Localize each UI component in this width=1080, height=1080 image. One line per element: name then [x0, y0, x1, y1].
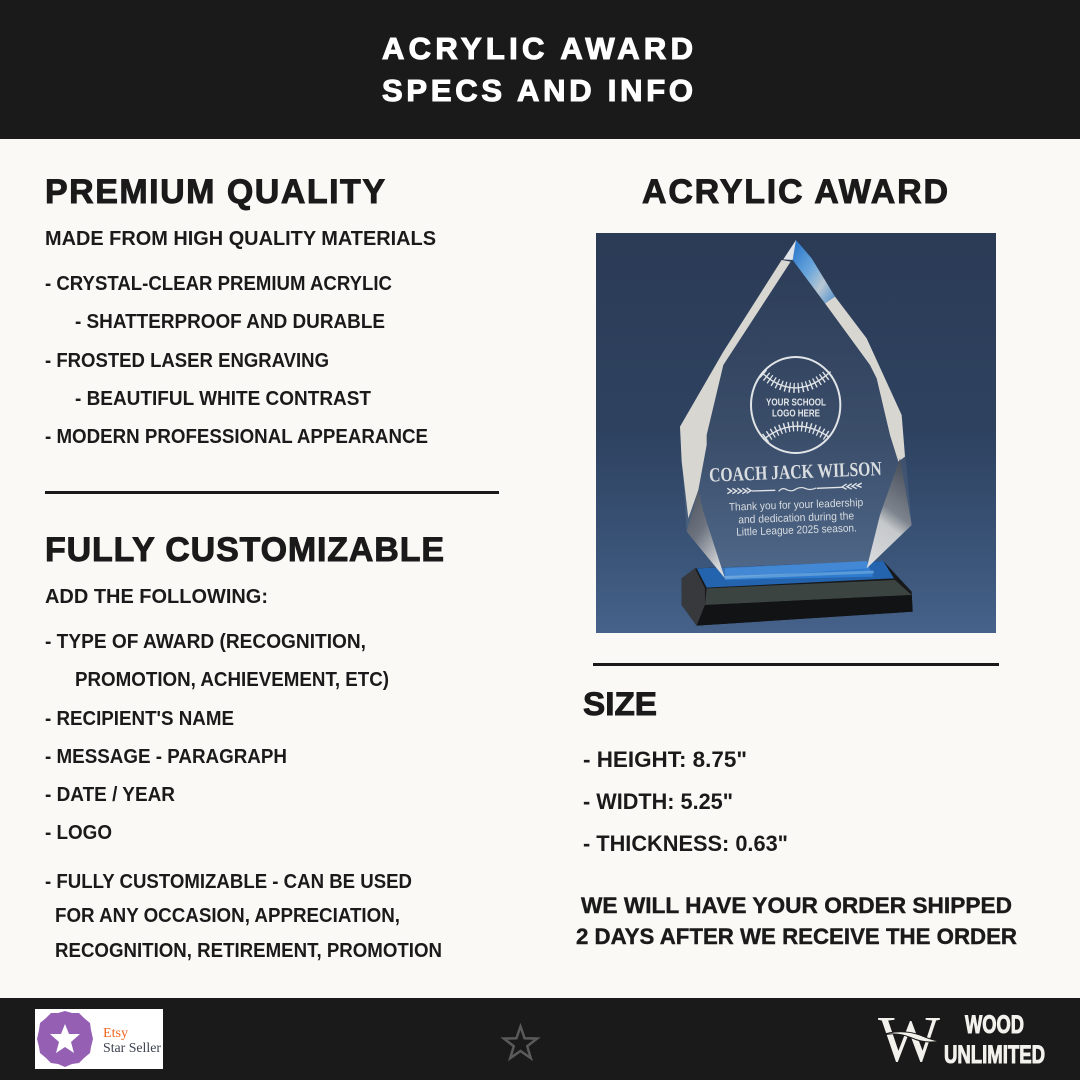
- logo: wood unlimited: UNLIMITED: [944, 1041, 1045, 1069]
- heading: acrylic award: ACRYLIC AWARD: [642, 173, 948, 211]
- list: material features: [45, 228, 436, 448]
- list: customization options: - TYPE OF AWARD (RECOGNITION,: [45, 631, 366, 653]
- logo: wood unlimited: [878, 1003, 1045, 1076]
- logo placeholder text: YOUR SCHOOL: [766, 397, 826, 408]
- list: customization options: [45, 586, 442, 962]
- heading: size: SIZE: [583, 686, 657, 722]
- list: customization options: ADD THE FOLLOWING:: [45, 586, 268, 608]
- panel: size specs: [583, 686, 788, 856]
- list: material features: - MODERN PROFESSIONAL APPEARANCE: [45, 426, 428, 448]
- list: dimensions: - THICKNESS: 0.63": [583, 831, 788, 856]
- icon: etsy star seller badge: [35, 1009, 163, 1069]
- list: dimensions: - WIDTH: 5.25": [583, 789, 733, 814]
- logo placeholder text: LOGO HERE: [772, 409, 820, 420]
- engraved message: [729, 497, 863, 539]
- engraved flourish: [727, 483, 862, 494]
- list: customization options: - LOGO: [45, 822, 112, 844]
- list: material features: - BEAUTIFUL WHITE CONTRAST: [75, 388, 371, 410]
- engraved message: Thank you for your leadership: [729, 497, 863, 514]
- logo: wood unlimited: W: [878, 1003, 941, 1076]
- list: dimensions: [583, 747, 788, 856]
- footer band: [0, 998, 1080, 1080]
- header band with title: ACRYLIC AWARD: [382, 31, 693, 66]
- heading: fully customizable: FULLY CUSTOMIZABLE: [45, 531, 444, 569]
- list: material features: - FROSTED LASER ENGRAVING: [45, 350, 329, 372]
- shipping note: WE WILL HAVE YOUR ORDER SHIPPED: [581, 893, 1012, 918]
- list: customization options: - FULLY CUSTOMIZABLE - CAN BE USED: [45, 871, 412, 893]
- icon: etsy star seller badge: Etsy: [103, 1026, 128, 1041]
- list: customization options: FOR ANY OCCASION, APPRECIATION,: [55, 905, 400, 927]
- icon: acrylic trophy: [680, 240, 912, 578]
- engraved message: and dedication during the: [738, 510, 854, 526]
- list: material features: - CRYSTAL-CLEAR PREMIUM ACRYLIC: [45, 273, 392, 295]
- list: customization options: - RECIPIENT'S NAME: [45, 708, 234, 730]
- panel: premium quality: [45, 173, 436, 448]
- list: customization options: - DATE / YEAR: [45, 784, 176, 806]
- header band with title: SPECS AND INFO: [382, 73, 693, 108]
- logo placeholder text: [766, 397, 826, 420]
- logo: wood unlimited: WOOD: [965, 1011, 1024, 1039]
- icon: award base: [682, 561, 913, 626]
- engraved name: COACH JACK WILSON: [709, 458, 882, 487]
- icon: etsy star seller badge: Star Seller: [103, 1041, 161, 1056]
- list: customization options: - MESSAGE - PARAGRAPH: [45, 746, 287, 768]
- list: material features: MADE FROM HIGH QUALITY MATERIALS: [45, 228, 436, 250]
- shipping note: [576, 893, 1017, 949]
- engraved message: Little League 2025 season.: [736, 522, 857, 539]
- header band with title: [0, 0, 1080, 139]
- heading: premium quality: PREMIUM QUALITY: [45, 173, 385, 211]
- list: customization options: RECOGNITION, RETIREMENT, PROMOTION: [55, 940, 442, 962]
- list: customization options: PROMOTION, ACHIEVEMENT, ETC): [75, 669, 389, 691]
- panel: fully customizable: [45, 531, 444, 962]
- icon: baseball logo: [751, 357, 840, 453]
- product image: acrylic award: [596, 233, 996, 633]
- shipping note: 2 DAYS AFTER WE RECEIVE THE ORDER: [576, 924, 1017, 949]
- list: dimensions: - HEIGHT: 8.75": [583, 747, 747, 772]
- icon: star outline: [504, 1026, 537, 1058]
- list: material features: - SHATTERPROOF AND DURABLE: [75, 311, 385, 333]
